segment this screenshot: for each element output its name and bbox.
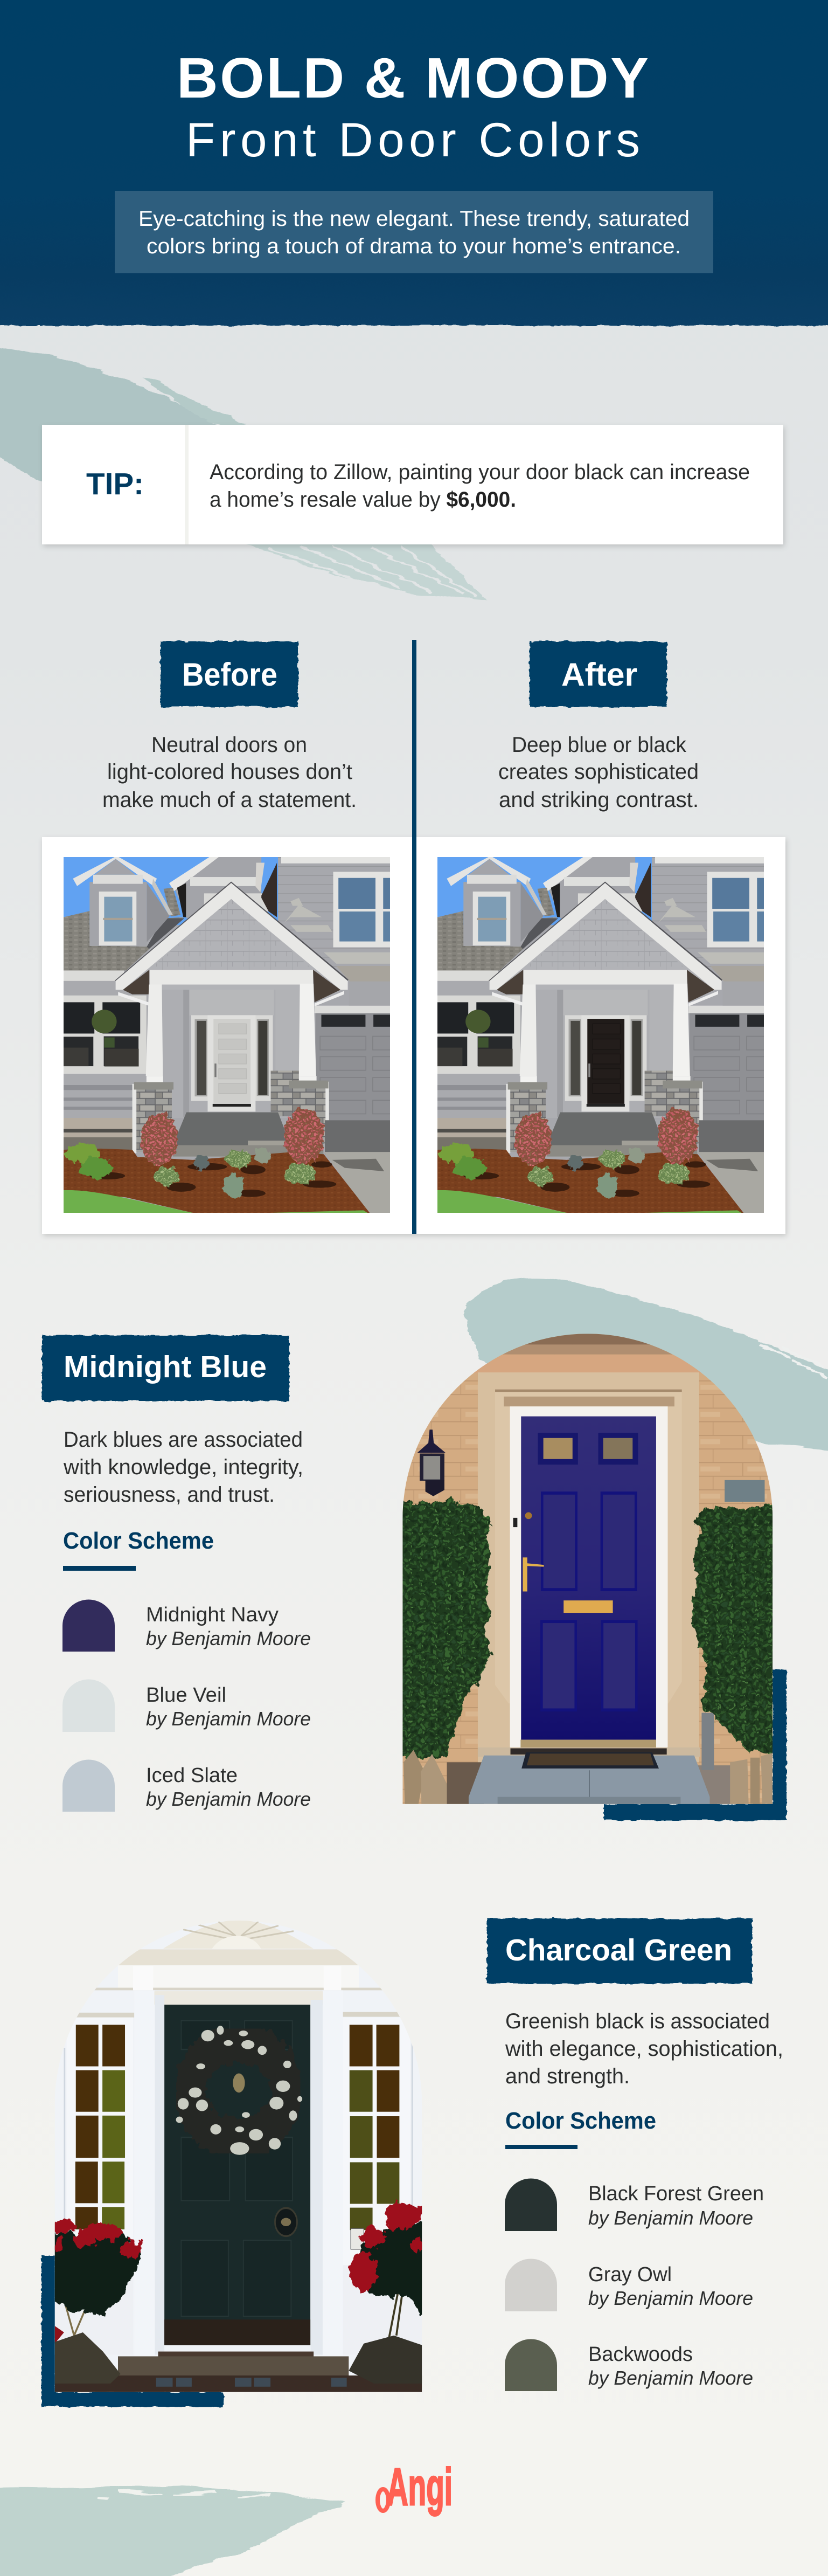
stone wall <box>399 1326 787 1811</box>
brush stroke: under tip box <box>238 542 486 600</box>
charcoal green description: Greenish black is associated <box>505 2009 770 2033</box>
swatch: backwoods: Backwoods <box>588 2343 693 2366</box>
tip label: TIP: <box>86 467 144 501</box>
color scheme heading: charcoal <box>505 2108 656 2149</box>
photo: before, house with white door <box>64 857 392 1213</box>
blue corner accent: midnight door <box>604 1669 787 1820</box>
photo: midnight blue door <box>396 1326 787 1811</box>
swatch: gray owl: Gray Owl <box>588 2263 672 2286</box>
right poinsettia <box>350 2201 429 2339</box>
swatch: black forest green: by Benjamin Moore <box>588 2207 753 2229</box>
after column heading <box>530 641 667 707</box>
swatch: blue veil: Blue Veil <box>146 1684 226 1707</box>
right ivy <box>691 1502 780 1753</box>
swatch: iced slate: Iced Slate <box>146 1764 238 1787</box>
left poinsettia <box>48 2219 143 2344</box>
swatch: midnight navy <box>62 1600 311 1652</box>
straw mound left <box>55 2332 121 2384</box>
swatch: iced slate <box>62 1760 311 1812</box>
swatch: midnight navy: Midnight Navy <box>146 1604 279 1626</box>
swatch: backwoods: by Benjamin Moore <box>588 2367 753 2389</box>
subtitle panel: Eye-catching is the new elegant. These trendy, saturated <box>138 207 690 231</box>
header torn paper background <box>0 0 828 326</box>
slate plaque <box>725 1480 764 1502</box>
tip callout <box>42 425 783 544</box>
charcoal green description <box>505 2009 783 2088</box>
after column heading: After <box>561 657 637 693</box>
midnight blue description <box>63 1428 303 1507</box>
section heading: charcoal green <box>487 1918 752 1984</box>
right window <box>349 2025 400 2250</box>
tip text: According to Zillow, painting your door black can increase <box>210 460 750 484</box>
doormat and steps <box>447 1748 733 1806</box>
divider line <box>412 640 416 1234</box>
charcoal green door <box>164 2005 310 2345</box>
section heading: midnight blue: Midnight Blue <box>64 1350 267 1384</box>
tip text second line: a home’s resale value by $6,000. <box>210 488 516 512</box>
subtitle panel: colors bring a touch of drama to your home’s entrance. <box>147 234 681 258</box>
before column heading: Before <box>182 657 277 693</box>
after description <box>498 733 699 812</box>
color scheme heading: charcoal: Color Scheme <box>505 2108 656 2134</box>
swatch: midnight navy: by Benjamin Moore <box>146 1627 311 1649</box>
midnight blue description: with knowledge, integrity, <box>63 1455 303 1479</box>
section heading: charcoal green: Charcoal Green <box>505 1933 732 1967</box>
logo: angi <box>378 2457 453 2516</box>
title: bold and moody: BOLD & MOODY <box>177 46 649 110</box>
white door frame <box>510 1406 668 1749</box>
charcoal green description: and strength. <box>505 2064 630 2088</box>
after description: creates sophisticated <box>498 760 699 784</box>
pilasters and door frame <box>133 1966 343 2356</box>
before description <box>102 733 357 812</box>
photo: after, house with black door <box>437 857 766 1213</box>
left ivy <box>396 1499 492 1759</box>
after description: and striking contrast. <box>499 788 699 812</box>
after description: Deep blue or black <box>512 733 687 757</box>
stone door surround <box>478 1372 699 1762</box>
section heading: midnight blue <box>42 1335 289 1401</box>
swatch: gray owl: by Benjamin Moore <box>588 2287 753 2309</box>
neutral door <box>213 1019 251 1104</box>
before description: make much of a statement. <box>102 788 357 812</box>
color scheme heading: midnight <box>63 1528 214 1571</box>
straw mound right <box>349 2336 422 2384</box>
white facade <box>55 1922 287 2392</box>
subtitle panel <box>115 191 713 273</box>
before description: light-colored houses don’t <box>107 760 352 784</box>
swatch: black forest green <box>505 2179 764 2231</box>
swatch: gray owl <box>505 2259 753 2311</box>
sunburst fanlight <box>163 1920 314 1949</box>
photo: charcoal green door <box>55 1921 422 2392</box>
swatch: backwoods <box>505 2339 753 2391</box>
midnight blue description: Dark blues are associated <box>64 1428 303 1452</box>
brush stroke: top left <box>0 347 280 544</box>
before description: Neutral doors on <box>151 733 307 757</box>
blue corner accent: charcoal door <box>41 2256 224 2407</box>
title: front door colors: Front Door Colors <box>186 113 640 167</box>
brush stroke: behind midnight door <box>465 1277 828 1451</box>
color scheme heading: midnight: Color Scheme <box>63 1528 214 1554</box>
swatch: blue veil <box>62 1680 311 1732</box>
before column heading <box>161 641 298 707</box>
logo: angi: Angi <box>387 2457 453 2516</box>
midnight blue description: seriousness, and trust. <box>64 1483 275 1507</box>
swatch: black forest green: Black Forest Green <box>588 2183 764 2205</box>
wall lantern <box>417 1429 446 1496</box>
threshold, boards and bricks <box>55 2332 422 2392</box>
swatch: blue veil: by Benjamin Moore <box>146 1708 311 1730</box>
swatch: iced slate: by Benjamin Moore <box>146 1788 311 1810</box>
wreath <box>176 2026 302 2155</box>
brush stroke: bottom left <box>0 2486 346 2576</box>
black door <box>587 1019 624 1104</box>
charcoal green description: with elegance, sophistication, <box>505 2037 783 2061</box>
garden stones <box>403 1750 773 1804</box>
left window <box>75 2017 133 2229</box>
header banner <box>0 0 828 326</box>
downpipe <box>701 1713 714 1770</box>
photo card <box>42 837 785 1234</box>
navy door <box>520 1417 656 1748</box>
